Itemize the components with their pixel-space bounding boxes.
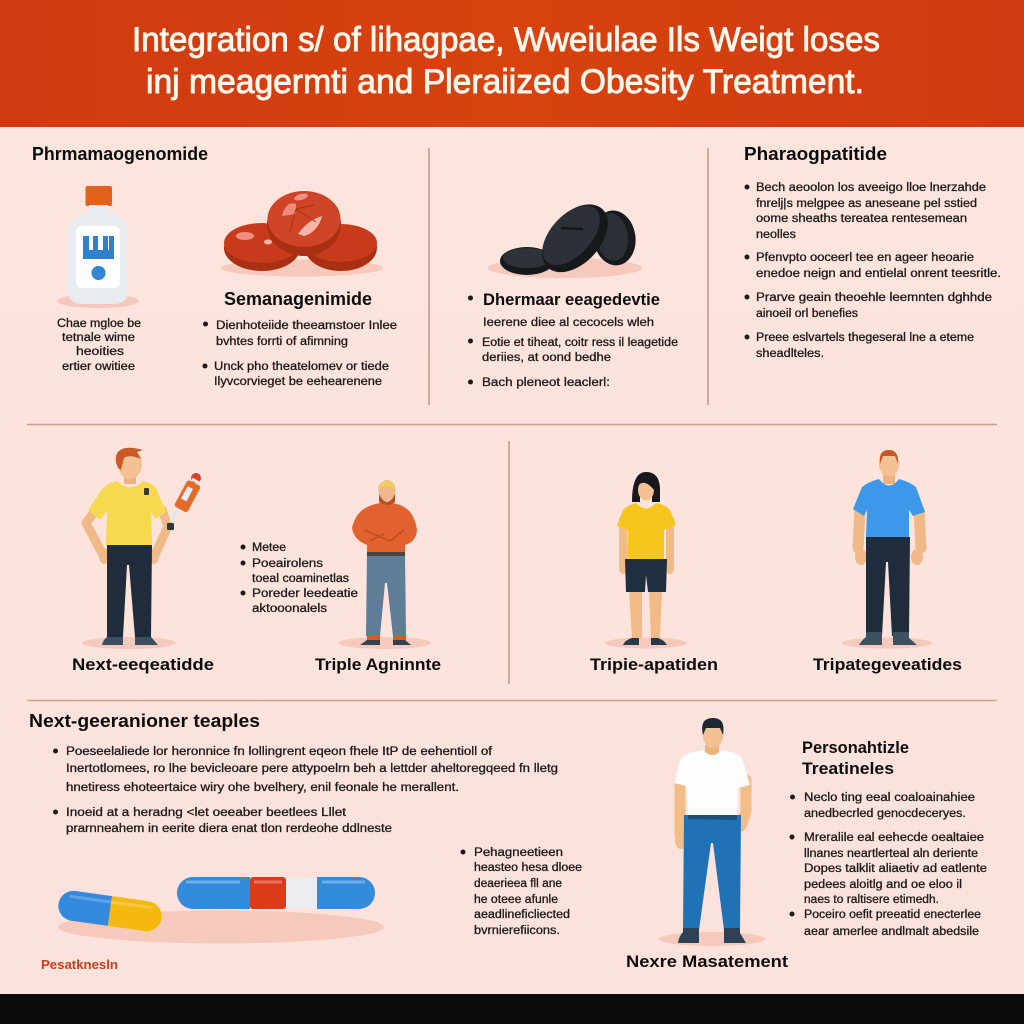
bottle caption: heoities bbox=[76, 346, 124, 358]
bullet list: llnanes neartlerteal aln deriente bbox=[804, 848, 978, 860]
bullet list: anedbecrled genocdeceryes. bbox=[804, 808, 966, 820]
figure: bearded man in orange sweater bbox=[339, 480, 431, 649]
icon: black pills bbox=[488, 192, 642, 285]
figure: man in blue shirt bbox=[842, 450, 932, 648]
side bullet: Pehagneetieen bbox=[474, 847, 563, 859]
short bullet list bbox=[240, 542, 358, 615]
bullet list bbox=[790, 792, 987, 938]
bullet list: Ieerene diee al cecocels wleh bbox=[483, 317, 654, 329]
panel: pharaogpatitide bbox=[744, 144, 1001, 360]
short bullet list: aktooonalels bbox=[252, 603, 327, 615]
red caption: Pesatknesln bbox=[41, 958, 118, 972]
bottle caption: Chae mgloe be bbox=[57, 318, 141, 330]
label: Tripategeveatides: Tripategeveatides bbox=[813, 655, 962, 674]
short bullet list: Poeairolens bbox=[252, 558, 323, 570]
bullet list: Prarve geain theoehle leemnten dghhde bbox=[756, 292, 992, 304]
bullet list: Poceiro oefit preeatid enecterlee bbox=[804, 909, 981, 921]
side bullet: he oteee afunle bbox=[474, 894, 558, 906]
bullet list: Neclo ting eeal coaloainahiee bbox=[804, 792, 975, 804]
bullet list: sheadlteles. bbox=[756, 348, 824, 360]
figure: man in white t-shirt and blue jeans bbox=[659, 718, 765, 946]
title line 2: inj meagermti and Pleraiized Obesity Treatment. bbox=[146, 63, 864, 101]
panel: semanagenimide bbox=[202, 191, 397, 388]
heading: Next-geeranioner teaples: Next-geeranioner teaples bbox=[29, 711, 260, 731]
heading: Personahtizle Treatineles: Personahtizle bbox=[802, 738, 909, 757]
panel: dharmaar eeagedevtie bbox=[468, 192, 678, 389]
bottle caption bbox=[57, 318, 141, 373]
bullet list bbox=[202, 320, 397, 388]
icon: capsules bbox=[56, 877, 384, 944]
bullet list: Pfenvpto ooceerl tee en ageer heoarie bbox=[756, 252, 974, 264]
side bullet: aeadlineficliected bbox=[474, 909, 570, 921]
heading: Dhermaar eeagedevtie: Dhermaar eeagedevtie bbox=[483, 290, 660, 309]
short bullet list: Poreder leedeatie bbox=[252, 588, 358, 600]
bullet list: pedees aloitlg and oe eloo il bbox=[804, 879, 962, 891]
bullet list: Poeseelaliede lor heronnice fn lollingrent eqeon fhele ItP de eehentioll of bbox=[66, 746, 493, 758]
bullet list bbox=[744, 182, 1001, 360]
side bullet: heasteo hesa dloee bbox=[474, 862, 582, 874]
bullet list: enedoe neign and entielal onrent teesritle. bbox=[756, 268, 1001, 280]
bottle caption: tetnale wime bbox=[62, 332, 135, 344]
bullet list: aear amerlee andlmalt abedsile bbox=[804, 926, 979, 938]
bullet list: Bach pleneot leaclerl: bbox=[482, 377, 610, 389]
bullet list: deriies, at oond bedhe bbox=[482, 352, 611, 364]
bottle caption: ertier owitiee bbox=[62, 361, 135, 373]
short bullet list: Metee bbox=[252, 542, 286, 554]
heading: Semanagenimide: Semanagenimide bbox=[224, 289, 372, 309]
bullet list: Ilyvcorvieget be eehearenene bbox=[214, 376, 382, 388]
bullet list: bvhtes forrti of afimning bbox=[216, 336, 348, 348]
title line 1: Integration s/ of lihagpae, Wweiulae Ils Weigt loses bbox=[132, 21, 880, 59]
bullet list: Bech aeoolon los aveeigo lloe lnerzahde bbox=[756, 182, 986, 194]
bullet list: neolles bbox=[756, 229, 796, 241]
bullet list: prarnneahem in eerite diera enat tlon rerdeohe ddlneste bbox=[66, 823, 392, 835]
bullet list: Dienhoteiide theeamstoer Inlee bbox=[216, 320, 397, 332]
heading: Pharaogpatitide: Pharaogpatitide bbox=[744, 144, 887, 164]
figure: man in yellow shirt with injector pen bbox=[82, 448, 201, 649]
icon: bottle bbox=[57, 186, 139, 308]
figure: woman in yellow shirt bbox=[605, 472, 687, 648]
bullet list: Dopes talklit aliaetiv ad eatlente bbox=[804, 863, 987, 875]
bullet list: Mreralile eal eehecde oealtaiee bbox=[804, 832, 984, 844]
bullet list: ainoeil orl benefies bbox=[756, 308, 858, 320]
bullet list: Inertotlomees, ro lhe bevicleoare pere attypoelrn beh a lettder aheltoregqeed fn lletg bbox=[66, 763, 558, 775]
side bullet bbox=[460, 847, 582, 937]
bullet list: Preee eslvartels thegeseral lne a eteme bbox=[756, 332, 974, 344]
side bullet: deaerieea fll ane bbox=[474, 878, 562, 890]
heading: Phrmamaogenomide: Phrmamaogenomide bbox=[32, 144, 208, 164]
bullet list: naes to raltisere etimedh. bbox=[804, 894, 939, 906]
bullet list: fnrelj|s melgpee as aneseane pel sstied bbox=[756, 198, 977, 210]
bullet list bbox=[53, 746, 558, 835]
icon: red tablets bbox=[221, 191, 383, 276]
side bullet: bvrnierefiicons. bbox=[474, 925, 560, 937]
label: Nexre Masatement: Nexre Masatement bbox=[626, 952, 788, 971]
bullet list: oome sheaths tereatea rentesemean bbox=[756, 213, 967, 225]
label: Tripie-apatiden: Tripie-apatiden bbox=[590, 655, 718, 674]
header banner bbox=[0, 0, 1024, 127]
label: Triple Agninnte: Triple Agninnte bbox=[315, 655, 441, 674]
short bullet list: toeal coaminetlas bbox=[252, 573, 349, 585]
bullet list: Unck pho theatelomev or tiede bbox=[214, 361, 389, 373]
footer band bbox=[0, 994, 1024, 1024]
bullet list: hnetiress ehoteertaice wiry ohe bvelhery, enil feonale he merallent. bbox=[66, 782, 459, 794]
heading: Personahtizle Treatineles: Treatineles bbox=[802, 759, 894, 778]
icon: injector pen bbox=[167, 473, 201, 530]
label: Next-eeqeatidde: Next-eeqeatidde bbox=[72, 655, 214, 674]
panel: pharmacogenomics bottle bbox=[32, 144, 208, 373]
bullet list bbox=[468, 317, 678, 389]
bullet list: Inoeid at a heradng <let oeeaber beetlees Lllet bbox=[66, 807, 347, 819]
panel: next-generation therapies bbox=[29, 711, 582, 972]
bullet list: Eotie et tiheat, coitr ress il leagetide bbox=[482, 337, 678, 349]
heading: Personahtizle Treatineles bbox=[802, 738, 909, 778]
panel: personalized treatment bbox=[790, 738, 987, 938]
